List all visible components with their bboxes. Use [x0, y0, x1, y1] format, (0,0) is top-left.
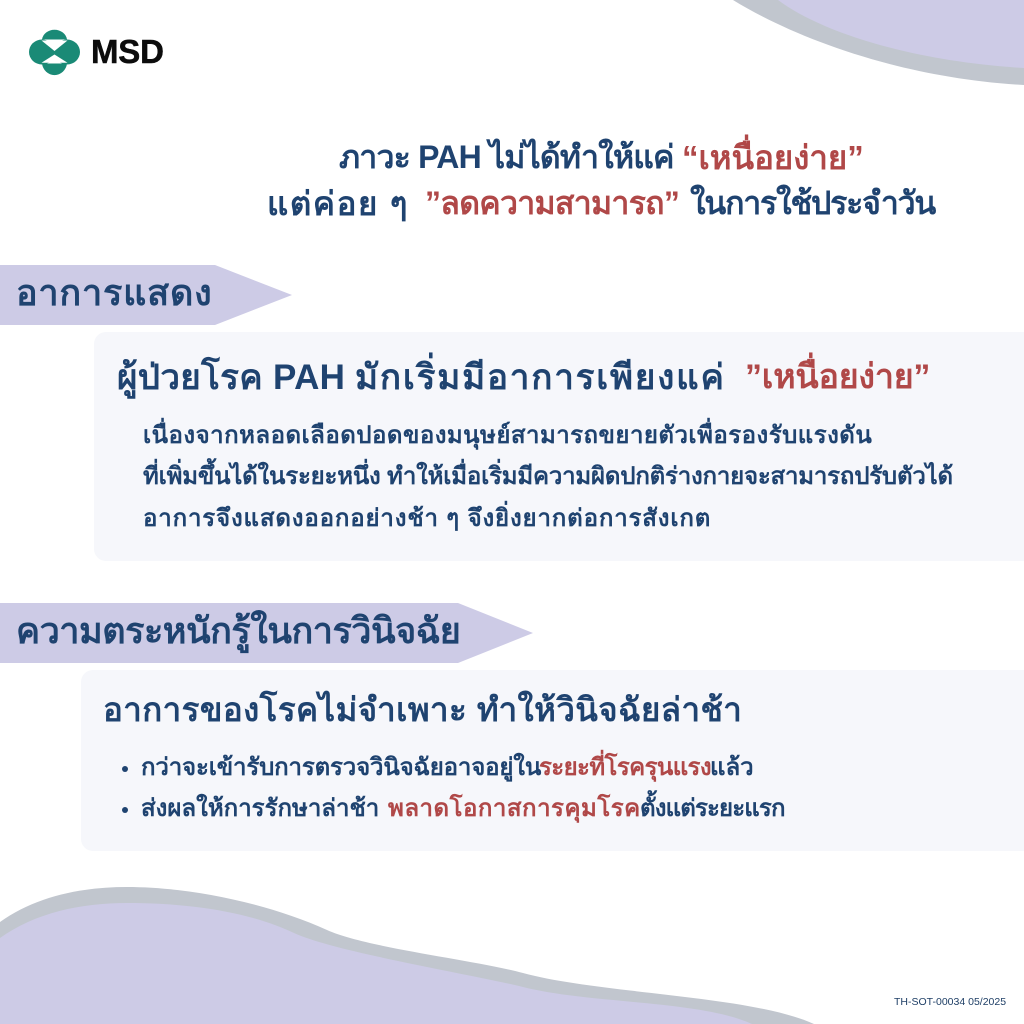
title line 2 highlight: ”ลดความสามารถ”	[425, 185, 679, 221]
title line 1: ภาวะ PAH ไม่ได้ทำให้แค่	[339, 139, 674, 175]
panel heading highlight: ”เหนื่อยง่าย”	[745, 358, 930, 396]
section banner: อาการแสดง	[0, 265, 292, 325]
icon: MSD symbol	[29, 30, 80, 76]
panel heading: ผู้ป่วยโรค PAH	[117, 358, 345, 397]
panel heading continuation: มักเริ่มมีอาการเพียงแค่	[355, 358, 726, 397]
title line 2 start: แต่ค่อย ๆ	[267, 185, 409, 222]
document code: TH-SOT-00034 05/2025	[894, 996, 1006, 1008]
bullet 1: ระยะที่โรครุนแรง	[539, 754, 711, 781]
bullet 2: ส่งผลให้การรักษาล่าช้า	[141, 795, 379, 822]
panel heading: อาการของโรคไม่จำเพาะ ทำให้วินิจฉัยล่าช้า	[103, 691, 742, 728]
panel body text: ที่เพิ่มขึ้นได้ในระยะหนึ่ง ทำให้เมื่อเริ่มมีความผิดปกติร่างกายจะสามารถปรับตัวได้	[143, 463, 953, 490]
arrow shape	[0, 265, 292, 325]
title line 1 highlight: “เหนื่อยง่าย”	[682, 139, 864, 176]
bullet 2	[122, 790, 785, 823]
panel body text	[143, 418, 953, 532]
bullet 1	[122, 750, 754, 782]
title	[267, 134, 936, 222]
banner heading: อาการแสดง	[16, 272, 213, 313]
title line 2 end: ในการใช้ประจำวัน	[690, 185, 935, 221]
panel: symptoms	[94, 332, 1024, 561]
section banner: ความตระหนักรู้ในการวินิจฉัย	[0, 603, 533, 663]
bullet 1: กว่าจะเข้ารับการตรวจวินิจฉัยอาจอยู่ใน	[141, 754, 541, 781]
bullet 2: ตั้งแต่ระยะแรก	[640, 795, 785, 822]
panel body text: เนื่องจากหลอดเลือดปอดของมนุษย์สามารถขยายตัวเพื่อรองรับแรงดัน	[143, 422, 872, 449]
banner heading: ความตระหนักรู้ในการวินิจฉัย	[16, 610, 460, 651]
panel: diagnosis awareness	[81, 670, 1024, 851]
bullet 2: พลาดโอกาสการคุมโรค	[388, 795, 641, 822]
logo wordmark: MSD	[91, 33, 164, 70]
arrow shape	[0, 603, 533, 663]
logo: MSD	[29, 30, 164, 76]
bullet list	[122, 750, 785, 823]
panel body text: อาการจึงแสดงออกอย่างช้า ๆ จึงยิ่งยากต่อการสังเกต	[143, 505, 711, 532]
bullet 1: แล้ว	[710, 754, 754, 781]
